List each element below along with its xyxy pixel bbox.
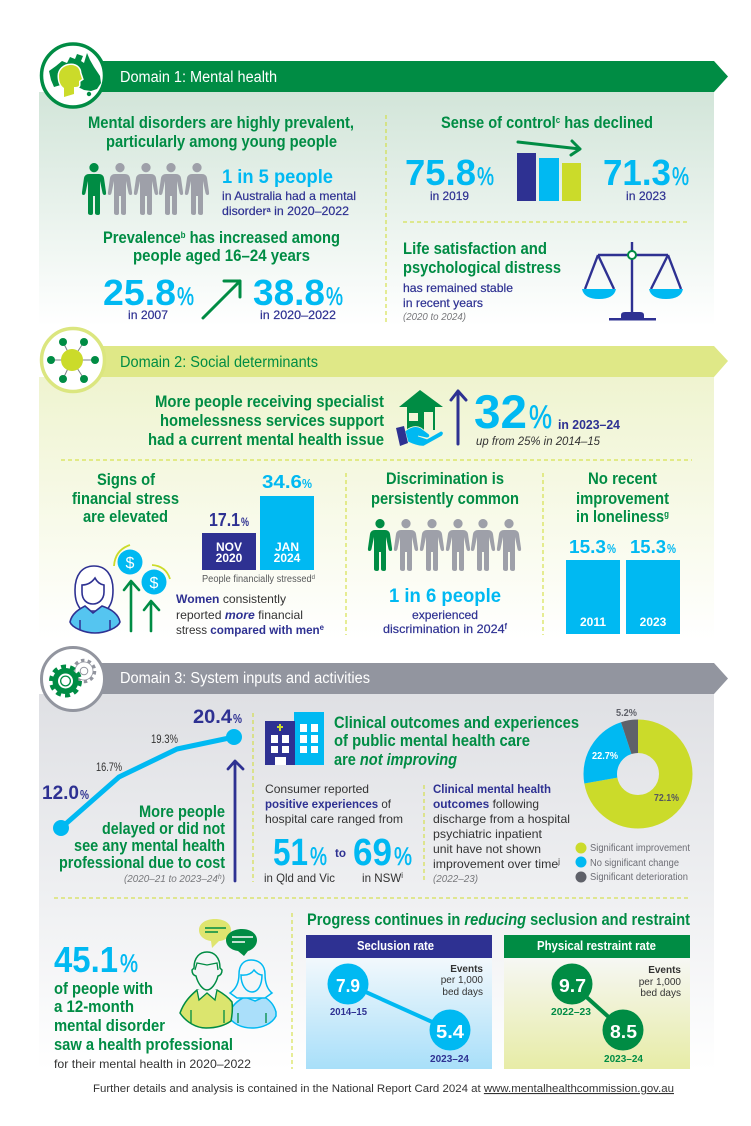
stat: 45.1% saw a health professional xyxy=(54,939,251,1071)
panel: seclusion rate: 5.4 xyxy=(436,1021,465,1042)
panel: physical restraint rate: per 1,000 xyxy=(639,977,681,988)
chart: financially stressed bars: 34.6 xyxy=(262,472,302,492)
text: clinical mental health outcomes: (2022–23) xyxy=(433,874,478,885)
chart: loneliness bars xyxy=(566,537,680,634)
text: clinical mental health outcomes: unit have not shown xyxy=(433,842,541,856)
heading: financial stress xyxy=(72,471,179,526)
stat: 75.8% in 2019 xyxy=(405,152,494,203)
domain 2 banner xyxy=(80,346,728,377)
stat: 45.1% saw a health professional: % xyxy=(120,950,138,978)
stat: 45.1% saw a health professional: saw a health professional xyxy=(54,1036,233,1054)
chart: loneliness bars: 15.3 xyxy=(630,537,666,557)
chart: financially stressed bars: % xyxy=(302,476,312,491)
stat: 1 in 5 people: in Australia had a mental xyxy=(222,189,356,203)
chart: loneliness bars: 2011 xyxy=(580,615,606,629)
icon: hospital xyxy=(265,712,324,765)
panel: physical restraint rate: Events xyxy=(648,965,681,976)
stat: 71.3% in 2023 xyxy=(603,152,689,203)
chart: delayed care line xyxy=(42,707,242,836)
stat: 75.8% in 2019: in 2019 xyxy=(430,189,469,203)
text: clinical mental health outcomes: discharge from a hospital xyxy=(433,812,570,826)
text: consumer experiences: Consumer reported xyxy=(265,782,369,796)
arrow: up xyxy=(228,761,243,881)
legend: donut: Significant improvement xyxy=(590,843,690,854)
panel: seclusion rate: 2014–15 xyxy=(330,1006,367,1018)
text: life satisfaction: has remained stable xyxy=(403,281,513,295)
text: delayed or did not see professional: More people xyxy=(139,803,225,821)
stat: 51% to 69%: in NSWi xyxy=(362,870,403,885)
icon: two people talking xyxy=(180,919,276,1028)
chart: outcomes donut: 72.1% xyxy=(654,793,679,804)
stat: 45.1% saw a health professional: of people with xyxy=(54,980,153,998)
chart: delayed care line: 12.0 xyxy=(42,783,79,804)
stat: 1 in 6 people xyxy=(383,585,508,636)
icon: balance scales xyxy=(582,242,683,320)
panel: seclusion rate: bed days xyxy=(442,987,483,998)
stat: 51% to 69%: 69 xyxy=(353,832,392,874)
domain 1 banner xyxy=(80,61,728,92)
icon: woman with rising costs: $ xyxy=(150,575,159,592)
stat: 45.1% saw a health professional: mental disorder xyxy=(54,1017,166,1035)
chart: outcomes donut xyxy=(592,708,679,812)
legend: donut: No significant change xyxy=(590,858,679,869)
heading: discrimination xyxy=(371,470,519,508)
stat: 38.8% in 2020-2022: in 2020–2022 xyxy=(260,308,336,322)
stat: 1 in 5 people: 1 in 5 people xyxy=(222,166,333,188)
panel: physical restraint rate: 8.5 xyxy=(610,1021,637,1042)
icon: Australia and head xyxy=(42,44,104,107)
chart: financially stressed bars: JAN xyxy=(275,540,299,554)
legend: donut: Significant deterioration xyxy=(590,872,688,883)
icon: woman with rising costs xyxy=(70,545,170,633)
domain 2 heading: Domain 2: Social determinants xyxy=(120,354,318,371)
legend: donut xyxy=(576,842,690,883)
text: consumer experiences: hospital care ranged from xyxy=(265,812,403,826)
panel: physical restraint rate xyxy=(504,935,690,1069)
stat: 32% in 2023-24: 32 xyxy=(474,385,527,438)
heading: prevalence increased: Prevalenceb has increased among xyxy=(103,229,340,247)
panel: seclusion rate: 7.9 xyxy=(336,975,360,996)
chart: delayed care line: % xyxy=(80,787,89,802)
text: clinical mental health outcomes: improvement over time j xyxy=(433,856,560,871)
heading: discrimination: Discrimination is xyxy=(386,470,504,488)
chart: delayed care line: 19.3% xyxy=(151,732,178,746)
heading: homelessness services: More people receiving specialist xyxy=(155,393,384,411)
stat: 1 in 5 people: disordera in 2020–2022 xyxy=(222,204,349,218)
stat: 51% to 69%: % xyxy=(394,843,412,871)
stat: 25.8% in 2007: in 2007 xyxy=(128,308,168,322)
chart: financially stressed bars: 2024 xyxy=(274,551,301,565)
heading: loneliness: No recent xyxy=(588,470,657,488)
heading: loneliness xyxy=(576,470,669,526)
arrow: increase xyxy=(203,281,240,318)
chart: financially stressed bars xyxy=(202,472,315,585)
chart: delayed care line: % xyxy=(233,711,242,726)
heading: clinical outcomes: of public mental health care xyxy=(334,732,530,750)
panel: physical restraint rate: 2023–24 xyxy=(604,1053,643,1065)
chart: financially stressed bars: 2020 xyxy=(216,551,243,565)
stat: 45.1% saw a health professional: 45.1 xyxy=(54,939,118,980)
heading: clinical outcomes xyxy=(334,714,579,769)
text: delayed or did not see professional: see any mental health xyxy=(74,837,225,855)
heading: mental disorders prevalent: particularly among young people xyxy=(106,133,337,151)
text: women report more stress xyxy=(176,592,325,637)
panel: seclusion rate: per 1,000 xyxy=(441,975,483,986)
stat: 38.8% in 2020-2022 xyxy=(253,272,343,322)
text: life satisfaction: in recent years xyxy=(403,296,483,310)
chart: financially stressed bars: NOV xyxy=(216,540,242,554)
text: delayed or did not see professional: professional due to cost xyxy=(59,854,225,872)
chart: declining bars xyxy=(517,141,581,201)
text: delayed or did not see professional: delayed or did not xyxy=(102,820,225,838)
stat: 71.3% in 2023: 71.3 xyxy=(603,152,671,193)
chart: financially stressed bars: 17.1 xyxy=(209,510,240,530)
panel: physical restraint rate: 9.7 xyxy=(559,975,586,996)
stat: 51% to 69%: 51 xyxy=(273,832,308,874)
heading: financial stress: Signs of xyxy=(97,471,155,489)
chart: loneliness bars: % xyxy=(667,541,676,556)
text: clinical mental health outcomes: psychiatric inpatient xyxy=(433,827,543,841)
panel: seclusion rate xyxy=(306,935,492,1069)
heading: homelessness services: homelessness services support xyxy=(160,412,384,430)
chart: loneliness bars: % xyxy=(607,541,616,556)
domain 1 heading: Domain 1: Mental health xyxy=(120,69,277,86)
heading: clinical outcomes: Clinical outcomes and experiences xyxy=(334,714,579,732)
heading: sense of control: Sense of controlc has declined xyxy=(441,114,653,132)
heading: financial stress: are elevated xyxy=(83,508,168,526)
arrow: up xyxy=(451,391,466,444)
stat: 75.8% in 2019: 75.8 xyxy=(405,152,476,193)
icon: gears xyxy=(42,648,104,710)
icon: network xyxy=(42,328,104,392)
stat: 51% to 69%: in Qld and Vic xyxy=(264,871,335,885)
text: life satisfaction: Life satisfaction and xyxy=(403,240,547,258)
panel: domain 3 system inputs and activities xyxy=(39,648,728,1071)
chart: financially stressed bars: % xyxy=(241,515,249,529)
chart: delayed care line: 20.4 xyxy=(193,707,232,728)
chart: financially stressed bars: People financially stressedd xyxy=(202,574,315,585)
stat: 45.1% saw a health professional: for their mental health in 2020–2022 xyxy=(54,1057,251,1071)
panel: domain 1 mental health xyxy=(39,44,728,326)
domain 3 banner xyxy=(80,663,728,694)
heading: homelessness services: had a current mental health issue xyxy=(148,431,384,449)
stat: 45.1% saw a health professional: a 12-month xyxy=(54,998,134,1016)
panel: domain 2 social determinants xyxy=(39,328,728,640)
chart: delayed care line: 16.7% xyxy=(96,760,122,774)
panel: physical restraint rate: bed days xyxy=(640,988,681,999)
icon: five people, one highlighted xyxy=(82,163,209,215)
text: life satisfaction: psychological distress xyxy=(403,259,561,277)
panel: seclusion rate: Seclusion rate xyxy=(357,938,434,953)
stat: 1 in 6 people: 1 in 6 people xyxy=(389,585,501,607)
stat: 51% to 69% xyxy=(264,832,412,885)
stat: 71.3% in 2023: in 2023 xyxy=(626,189,666,203)
text: life satisfaction: (2020 to 2024) xyxy=(403,312,466,323)
text: delayed or did not see professional: (2020–21 to 2023–24h) xyxy=(124,874,225,885)
heading: prevalence increased: people aged 16–24 years xyxy=(133,247,310,265)
text: consumer experiences: positive experiences of xyxy=(265,797,392,811)
stat: 1 in 6 people: discrimination in 2024 f xyxy=(383,622,508,636)
heading: financial stress: financial stress xyxy=(72,490,179,508)
panel: physical restraint rate: 2022–23 xyxy=(551,1006,591,1018)
text: women report more stress: Women consistently xyxy=(176,592,286,606)
stat: 25.8% in 2007: 25.8 xyxy=(103,272,176,313)
stat: 75.8% in 2019: % xyxy=(477,163,494,191)
text: clinical mental health outcomes xyxy=(433,782,570,885)
icon: six people, one highlighted xyxy=(368,519,521,571)
stat: 32% in 2023-24: % xyxy=(529,399,552,435)
footer note: Further details and analysis is contained in the National Report Card 2024 at www.mentalhealthcommission.gov.au xyxy=(93,1083,674,1095)
panel: physical restraint rate: Physical restraint rate xyxy=(537,938,656,953)
text: clinical mental health outcomes: outcomes following xyxy=(433,797,539,811)
text: delayed or did not see professional xyxy=(59,803,225,885)
stat: 25.8% in 2007: % xyxy=(177,283,194,311)
heading: loneliness: in lonelinessg xyxy=(576,508,669,526)
text: clinical mental health outcomes: Clinical mental health xyxy=(433,782,551,796)
text: life satisfaction xyxy=(403,240,561,323)
chart: loneliness bars: 2023 xyxy=(640,615,667,629)
heading: homelessness services xyxy=(148,393,384,449)
stat: 38.8% in 2020-2022: % xyxy=(326,283,343,311)
chart: outcomes donut: 5.2% xyxy=(616,708,637,719)
heading: clinical outcomes: are not improving xyxy=(334,751,457,769)
stat: 32% in 2023-24 xyxy=(474,385,621,448)
chart: loneliness bars: 15.3 xyxy=(569,537,606,557)
panel: seclusion rate: Events xyxy=(450,964,483,975)
text: women report more stress: stress compared with mene xyxy=(176,622,325,637)
stat: 1 in 5 people xyxy=(222,166,356,218)
heading: prevalence increased xyxy=(103,229,340,265)
stat: 32% in 2023-24: up from 25% in 2014–15 xyxy=(476,434,600,448)
text: women report more stress: reported more financial xyxy=(176,608,303,622)
heading: loneliness: improvement xyxy=(576,490,669,508)
stat: 1 in 6 people: experienced xyxy=(412,608,478,622)
heading: mental disorders prevalent xyxy=(88,114,354,151)
heading: progress on seclusion and restraint: Progress continues in reducing seclusion and restraint xyxy=(307,911,690,929)
icon: house in hand xyxy=(396,390,443,446)
stat: 25.8% in 2007 xyxy=(103,272,194,322)
stat: 38.8% in 2020-2022: 38.8 xyxy=(253,272,325,313)
panel: seclusion rate: 2023–24 xyxy=(430,1053,469,1065)
text: consumer experiences xyxy=(265,782,403,826)
icon: woman with rising costs: $ xyxy=(126,555,135,572)
domain 3 heading: Domain 3: System inputs and activities xyxy=(120,670,370,687)
chart: outcomes donut: 22.7% xyxy=(592,751,618,762)
stat: 51% to 69%: % xyxy=(310,843,327,871)
stat: 51% to 69%: to xyxy=(335,846,346,860)
stat: 32% in 2023-24: in 2023–24 xyxy=(558,417,621,432)
heading: discrimination: persistently common xyxy=(371,490,519,508)
heading: mental disorders prevalent: Mental disorders are highly prevalent, xyxy=(88,114,354,132)
stat: 71.3% in 2023: % xyxy=(672,163,689,191)
